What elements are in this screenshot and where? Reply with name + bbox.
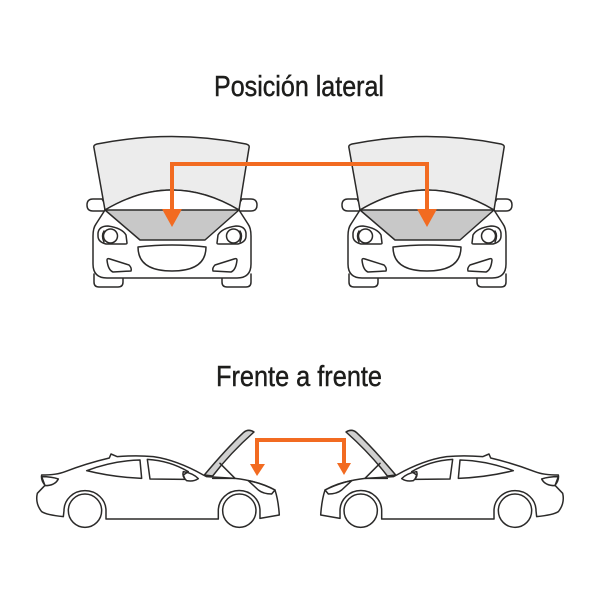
title: Frente a frente: Frente a frente [216, 361, 382, 393]
arrow: connection between side-view cars [250, 440, 351, 476]
car side view, left [37, 430, 279, 527]
car side view, right [321, 430, 563, 527]
car front view, right [342, 136, 512, 287]
arrow: connection between front-view cars [162, 164, 437, 227]
title: Posición lateral: Posición lateral [214, 71, 384, 103]
car front view, left [87, 136, 257, 287]
